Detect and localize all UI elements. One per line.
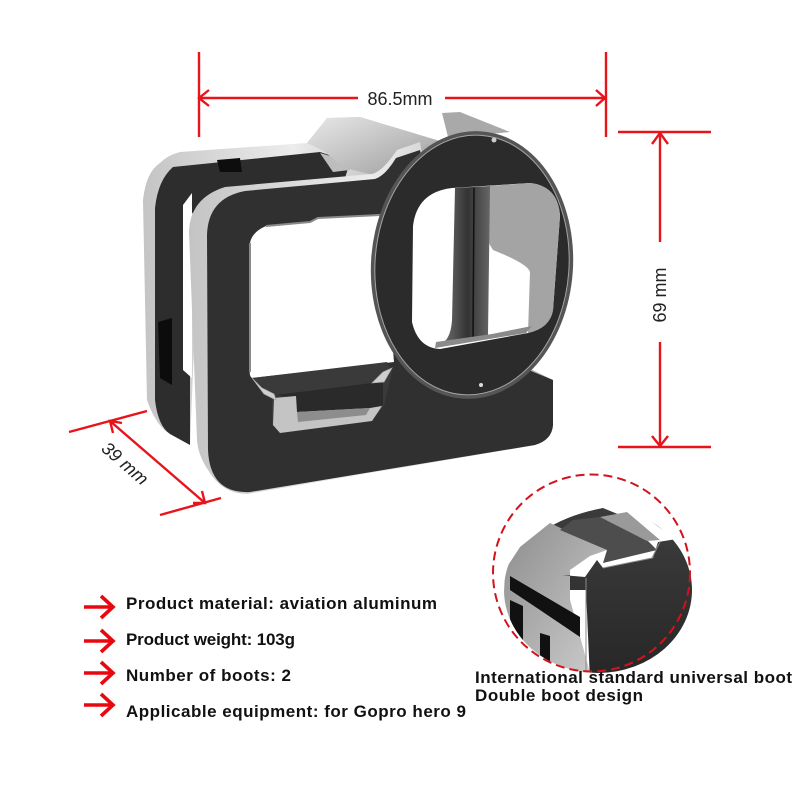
detail photo [500,508,692,680]
spec 4 [84,694,466,721]
dimension: height 69 mm [618,132,711,447]
spec 3 [84,662,291,685]
support post [445,186,490,341]
spec 1: Product material: aviation aluminum [126,594,437,613]
dimension: width 86.5mm: 86.5mm [367,89,433,109]
spec list [84,594,466,721]
spec 2 [84,630,295,652]
spec 3: Number of boots: 2 [126,666,291,685]
dimension: width 86.5mm [199,52,606,137]
frame window [250,214,394,378]
detail dark strips [510,576,580,661]
detail top opening [560,517,657,563]
front frame black face [207,150,553,492]
window inner rim [250,215,380,372]
caption: Double boot design [475,686,643,705]
detail rear lug [652,522,664,530]
spec 4: Applicable equipment: for Gopro hero 9 [126,702,466,721]
post shadow line [473,188,474,340]
detail latch [600,512,660,541]
spec 1 [84,594,437,618]
panel lip [435,326,532,348]
dashed circle [493,474,690,672]
ring opening [412,183,560,349]
lens panel [487,183,560,333]
lens ring [362,124,582,406]
spec 2: Product weight: 103g [126,630,295,649]
rear lug [442,112,510,137]
bottom notch [252,362,392,433]
back frame [143,117,443,445]
dimension: height 69 mm: 69 mm [650,267,670,323]
detail left silver frame [500,523,607,680]
caption: International standard universal boot [475,668,792,687]
product photo: camera frame [143,112,582,494]
dimension: depth 39 mm: 39 mm [98,438,152,489]
front frame silver edge [189,142,553,494]
detail dark body [562,538,692,680]
detail ring arc [554,508,618,528]
caption [475,668,792,705]
dimension: depth 39 mm [69,411,221,515]
top latch [307,117,443,176]
detail body edge [586,542,660,680]
